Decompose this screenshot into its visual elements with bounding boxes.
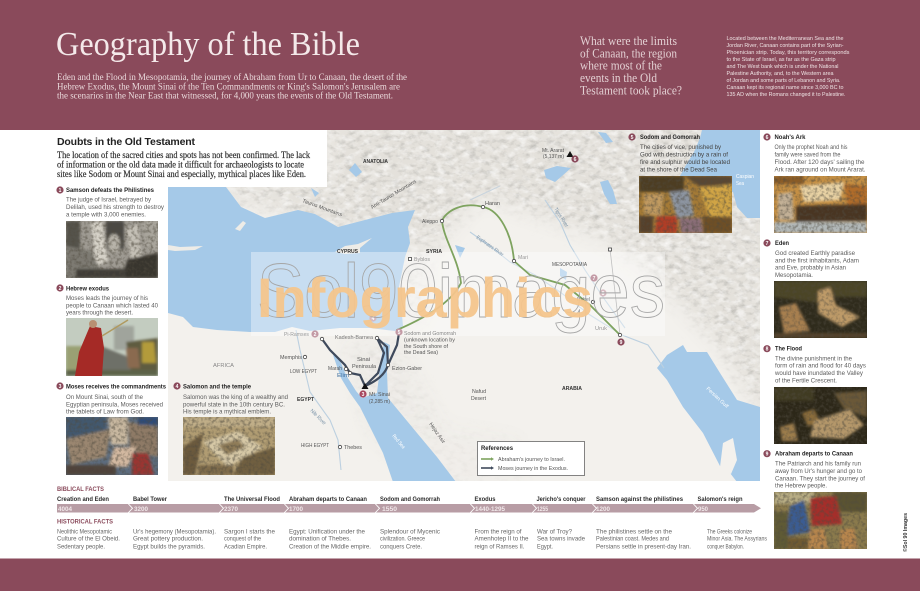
timeline event titles: Creation and Eden — [57, 496, 109, 503]
panel: 8 The Flood: form of rain and flood for 40 days — [775, 363, 867, 370]
panel: doubts intro — [57, 136, 310, 179]
timeline bar: 1700 — [289, 506, 303, 513]
panel: 6 Noah's Ark: Noah's Ark — [774, 134, 806, 141]
map labels: Anti-Taurus Mountains — [370, 179, 418, 211]
map labels: MESOPOTAMIA — [552, 262, 587, 268]
watermark: Infographics: Infographics — [257, 266, 593, 329]
timeline event titles: Samson against the philistines — [596, 496, 684, 503]
panel: 7 Eden: and the first inhabitants, Adam — [775, 257, 859, 264]
panel: 5 Sodom and Gomorrah: at the shore of the Dead Sea — [640, 166, 717, 173]
map labels: Desert — [471, 396, 487, 402]
panel: 4 Salomon and the temple: His temple is a mythical emblem. — [183, 409, 271, 416]
canaan description: to the State of Israel, as far as the Gaza strip — [726, 57, 836, 63]
panel: 6 Noah's Ark: Only the prophet Noah and his — [774, 144, 848, 151]
historical facts columns: Creation of the Middle empire. — [289, 543, 371, 550]
historical facts columns: Neolithic Mesopotamic — [57, 528, 112, 535]
map labels: Red Sea — [390, 433, 406, 450]
title: Geography of the Bible — [56, 26, 360, 63]
canaan description: Located between the Mediterranean Sea and the — [726, 36, 844, 42]
timeline heading: historical facts: HISTORICAL FACTS — [57, 518, 113, 525]
panel: 8 The Flood: The Flood — [775, 346, 802, 353]
historical facts columns: Persians settle in present-day Iran. — [596, 543, 691, 550]
map labels: Nafud — [472, 389, 486, 395]
map number badges: 3 — [362, 392, 365, 398]
panel: 7 Eden: God created Earthly paradise — [775, 250, 855, 257]
timeline event titles: Exodus — [474, 496, 496, 503]
panel: 9 Abraham departs — [763, 450, 867, 549]
intro text — [57, 72, 407, 102]
intro text: Eden and the Flood in Mesopotamia, the journey of Abraham from Ur to Canaan, the desert of the — [57, 72, 407, 83]
image: commandments — [66, 417, 158, 475]
historical facts columns: Acadian Empire. — [224, 543, 267, 550]
map labels: Ezion-Gaber — [392, 366, 422, 372]
lakes — [311, 132, 617, 280]
map labels: Mari — [518, 255, 528, 261]
image: exodus — [66, 318, 158, 376]
timeline event titles: Salomon's reign — [698, 496, 743, 503]
map — [160, 125, 770, 490]
timeline bar: 3200 — [134, 506, 148, 513]
image: Abraham — [774, 492, 867, 549]
map labels: Sodom and Gomorrah — [404, 331, 456, 337]
legend: references — [478, 442, 584, 476]
panel: 4 Salomon and the temple — [173, 382, 288, 475]
panel: 3 Moses commandments — [56, 382, 166, 475]
map labels: Mt. Ararat — [542, 148, 565, 154]
timeline bar: 1200 — [596, 506, 610, 513]
timeline event titles: Sodom and Gomorrah — [380, 496, 440, 503]
map labels: ARABIA — [562, 386, 582, 392]
historical facts columns: conquers Crete. — [380, 543, 422, 550]
panel: 8 The Flood — [763, 345, 867, 444]
question text: where most of the — [580, 59, 662, 73]
rivers — [296, 186, 664, 470]
map labels: SYRIA — [426, 249, 442, 255]
map labels: Taurus Mountains — [301, 198, 343, 218]
panel: 7 Eden: 7 — [766, 241, 769, 247]
timeline event titles: Abraham departs to Canaan — [289, 496, 367, 503]
timeline event titles: Jericho's conquer — [536, 496, 586, 503]
timeline: historical facts — [57, 518, 767, 550]
panel: 5 Sodom and Gomorrah: God with destruction by a rain of — [640, 152, 728, 158]
intro text: the scenarios in the Near East that witnessed, for 4,000 years the events of the Old Testament. — [57, 91, 393, 102]
panel: 9 Abraham departs: 9 — [766, 452, 769, 458]
map labels: Thebes — [344, 445, 362, 451]
map labels: Aleppo — [422, 219, 438, 225]
islands — [168, 221, 372, 254]
mediterranean sea — [160, 187, 415, 332]
map labels: Byblos — [414, 257, 430, 263]
panel: 6 Noah's Ark: Ark ran aground on Mount Ararat. — [774, 166, 866, 173]
map labels: Uruk — [595, 326, 607, 332]
panel: 7 Eden: and Eve, probably in Asian — [775, 265, 846, 272]
timeline bar: 4004 — [58, 506, 72, 513]
panel: 3 Moses commandments: On Mount Sinai, south of the — [66, 394, 143, 401]
doubts body text: The location of the sacred cities and spots has not been confirmed. The lack — [57, 150, 310, 160]
historical facts columns: Egypt. — [537, 543, 553, 550]
panel: 2 Hebrew exodus: Moses leads the journey of his — [66, 295, 149, 302]
map labels: EGYPT — [297, 397, 315, 403]
historical facts columns: The Greeks colonize — [707, 528, 752, 535]
map labels: Nile River — [309, 408, 327, 427]
map number badges — [311, 155, 625, 398]
panel: 6 Noah's Ark: 6 — [766, 135, 769, 141]
map number badges: 4 — [372, 316, 375, 322]
legend: references: Abraham's journey to Israel. — [498, 457, 565, 463]
map number badges: 8 — [602, 291, 605, 297]
historical facts columns: The philistines settle on the — [596, 528, 673, 535]
map nodes — [303, 205, 622, 449]
map labels: (unknown location by — [404, 338, 455, 344]
panel: 4 Salomon and the temple: 4 — [176, 384, 179, 390]
historical facts columns: Great pottery production. — [133, 536, 203, 543]
historical facts columns: Amenhotep II to the — [474, 536, 529, 543]
panel: 2 Hebrew exodus — [56, 284, 158, 376]
historical facts columns: reign of Ramses II. — [474, 543, 525, 550]
historical facts columns: Sedentary people. — [57, 543, 105, 550]
panel: 9 Abraham departs: Abraham departs to Canaan — [775, 451, 853, 458]
map labels: Hejaz Asir — [427, 422, 446, 445]
mountain markers — [362, 151, 574, 389]
canaan description: Phoenician strip. Today, this territory corresponds — [726, 50, 850, 56]
historical facts columns: Minor Asia. The Assyrians — [707, 536, 767, 543]
legend: references: Moses journey in the Exodus. — [498, 466, 568, 472]
historical facts columns: Sea towns invade — [537, 536, 586, 543]
map labels: Sea — [736, 181, 744, 187]
canaan description: Canaan kept its regional name since 3,000 BC to — [726, 85, 844, 91]
historical facts columns: War of Troy? — [537, 528, 573, 535]
map labels: Sinai — [357, 357, 370, 363]
timeline bar: 1440-1295 — [475, 506, 505, 513]
map labels: Elim — [337, 373, 349, 379]
image: Samson — [66, 221, 158, 278]
panel: 7 Eden: Eden — [775, 240, 789, 247]
canaan description — [726, 36, 850, 98]
panel: 8 The Flood: of the Fertile Crescent. — [775, 377, 837, 384]
red sea — [333, 342, 456, 482]
image: temple — [183, 417, 275, 475]
panel: 5 Sodom and Gomorrah: Sodom and Gomorrah — [640, 134, 700, 141]
panel: 9 Abraham departs: The Patriarch and his family run — [775, 461, 861, 468]
moses route — [322, 333, 399, 386]
panel: 8 The Flood: The divine punishment in the — [775, 355, 852, 362]
map labels: Persian Gulf — [705, 386, 730, 410]
question text — [580, 34, 682, 97]
panel: 4 Salomon and the temple: Salomon was the king of a wealthy and — [183, 394, 288, 401]
historical facts columns: conquer Babylon. — [707, 543, 744, 550]
canaan description: Jordan River, Canaan contains part of the Syrian- — [726, 43, 844, 49]
panel: 4 Salomon and the temple: powerful state in the 10th century BC. — [183, 401, 285, 408]
historical facts columns: Egypt builds the pyramids. — [133, 543, 205, 550]
map labels: Euphrates River — [475, 235, 505, 258]
panel: 5 Sodom and Gomorrah — [628, 133, 732, 233]
canaan description: Palestine Authority, and, to the Western area — [726, 71, 834, 77]
panel: 5 Sodom and Gomorrah: The cities of vice, punished by — [640, 144, 722, 151]
panel: 6 Noah's Ark: Flood. After 120 days' sailing the — [774, 159, 865, 166]
image: Sodom — [639, 176, 732, 233]
map labels: Pi-Ramses — [284, 332, 309, 338]
panel: 7 Eden: Mesopotamia. — [775, 272, 813, 279]
timeline bar: 950 — [698, 506, 708, 513]
timeline bar: 1550 — [382, 506, 397, 513]
map labels: Babel — [577, 297, 590, 303]
map labels: CYPRUS — [337, 249, 359, 255]
panel: 1 Samson — [56, 186, 165, 278]
historical facts columns: Splendour of Mycenic — [380, 528, 440, 535]
image: Flood — [774, 387, 867, 444]
map labels: Mt. Sinai — [369, 392, 390, 398]
panel: 9 Abraham departs: Canaan. They start the journey of — [775, 475, 865, 482]
image: Noah — [774, 176, 867, 233]
map labels: Kadesh-Barnea — [335, 335, 373, 341]
historical facts columns: conquest of the — [224, 536, 261, 543]
historical facts columns: Culture of the El Obeid. — [57, 536, 120, 543]
panel: 2 Hebrew exodus: Hebrew exodus — [66, 285, 109, 292]
timeline event titles: Babel Tower — [133, 496, 168, 503]
historical facts columns: domination of Thebes. — [289, 536, 351, 543]
persian gulf — [657, 345, 760, 482]
map labels: ANATOLIA — [363, 159, 388, 165]
doubts body text: sites like Sodom or Mount Sinai and especially, mythical places like Eden. — [57, 169, 306, 179]
map labels: Caspian — [736, 174, 754, 180]
historical facts columns: From the reign of — [474, 528, 522, 535]
map number badges: 5 — [398, 330, 401, 336]
panel: 5 Sodom and Gomorrah: fire and sulphur would be located — [640, 159, 730, 166]
timeline: biblical facts — [57, 486, 761, 513]
timeline bar — [57, 504, 761, 513]
map labels: Peninsula — [352, 364, 376, 370]
panel: 6 Noah's Ark — [763, 133, 867, 233]
map labels — [213, 148, 754, 451]
panel: 2 Hebrew exodus: years through the desert. — [66, 310, 133, 317]
panel: 8 The Flood: 8 — [766, 347, 769, 353]
question text: Testament took place? — [580, 83, 682, 97]
historical facts columns: Palestinian coast. Medes and — [596, 536, 669, 543]
map labels: Haran — [485, 201, 500, 207]
map number badges: 7 — [593, 276, 596, 282]
map labels: the Dead Sea) — [404, 350, 438, 356]
map labels: (2,285 m) — [369, 399, 390, 405]
question text: events in the Old — [580, 71, 658, 85]
doubts body text — [57, 150, 310, 179]
map labels: Marah — [328, 366, 342, 372]
watermark haze — [251, 252, 665, 336]
credit: ©Sol 90 Images — [902, 513, 909, 552]
timeline heading: biblical facts: BIBLICAL FACTS — [57, 486, 104, 493]
panel: 7 Eden — [763, 239, 867, 338]
legend: references: References — [481, 445, 513, 452]
timeline bar: 2370 — [224, 506, 238, 513]
canaan description: and The West bank which is under the National — [726, 64, 838, 70]
timeline event titles — [57, 496, 743, 503]
panel: 1 Samson: Delilah, used his strength to destroy — [66, 204, 165, 211]
map number badges: 9 — [620, 340, 623, 346]
heading: doubts: Doubts in the Old Testament — [57, 136, 196, 148]
routes — [322, 205, 620, 386]
question text: of Canaan, the region — [580, 46, 678, 60]
historical facts columns: Egypt: Unification under the — [289, 528, 366, 535]
map labels: HIGH EGYPT — [301, 443, 330, 449]
doubts body text: of information or the old data made it difficult for archaeologists to locate — [57, 160, 304, 170]
abraham route — [397, 205, 620, 335]
map labels: the South shore of — [404, 344, 449, 350]
panel: 4 Salomon and the temple: Salomon and the temple — [183, 383, 251, 390]
image: Eden — [774, 281, 867, 338]
historical facts columns: Sargon I starts the — [224, 528, 276, 535]
panel: 2 Hebrew exodus: people to Canaan which lasted 40 — [66, 302, 158, 309]
caspian sea — [680, 130, 760, 218]
map number badges: 2 — [314, 332, 317, 338]
map labels: Tigris River — [552, 207, 569, 229]
map number badges: 6 — [574, 157, 577, 163]
panel: 3 Moses commandments: Moses receives the commandments — [66, 383, 166, 390]
panel: 3 Moses commandments: the tablets of Law from God. — [66, 409, 144, 416]
map labels: Memphis — [280, 355, 302, 361]
intro text: Hebrew Exodus, the Mount Sinai of the Ten Commandments or King's Salomon's Jerusalem are — [57, 81, 400, 92]
footer band — [0, 558, 920, 591]
historical facts columns: Ur's hegemony (Mesopotamia). — [133, 528, 216, 535]
panel: 1 Samson: a temple with 3,000 enemies. — [66, 211, 146, 218]
historical facts columns: civilization. Greece — [380, 536, 425, 543]
watermark: Sol90images: Sol90images — [257, 249, 665, 334]
canaan description: of Jordan and some parts of Lebanon and Syria. — [726, 78, 841, 84]
panel: 5 Sodom and Gomorrah: 5 — [631, 135, 634, 141]
panel: 3 Moses commandments: Egyptian peninsula, Moses received — [66, 401, 163, 408]
panel: 1 Samson: The judge of Israel, betrayed by — [66, 197, 152, 204]
question text: What were the limits — [580, 34, 677, 48]
map labels: LOW EGYPT — [290, 369, 318, 375]
header band — [0, 0, 920, 130]
panel: 2 Hebrew exodus: 2 — [59, 286, 62, 292]
panel: 8 The Flood: would have inundated the Valley — [774, 370, 864, 377]
panel: 1 Samson: Samson defeats the Philistines — [66, 187, 154, 194]
panel: 3 Moses commandments: 3 — [59, 384, 62, 390]
map labels: (5,137 m) — [543, 154, 564, 160]
timeline bar: 1255 — [537, 506, 548, 513]
panel: 9 Abraham departs: the Hebrew people. — [775, 483, 827, 490]
panel: 1 Samson: 1 — [59, 188, 62, 194]
panel: 6 Noah's Ark: family were saved from the — [774, 152, 841, 158]
timeline event titles: The Universal Flood — [224, 496, 280, 503]
canaan description: 135 AD when the Romans changed it to Palestine. — [726, 92, 846, 98]
panel: 9 Abraham departs: away from Ur's hunger and go to — [775, 468, 862, 475]
historical facts columns — [57, 528, 767, 550]
map labels: AFRICA — [213, 363, 235, 369]
